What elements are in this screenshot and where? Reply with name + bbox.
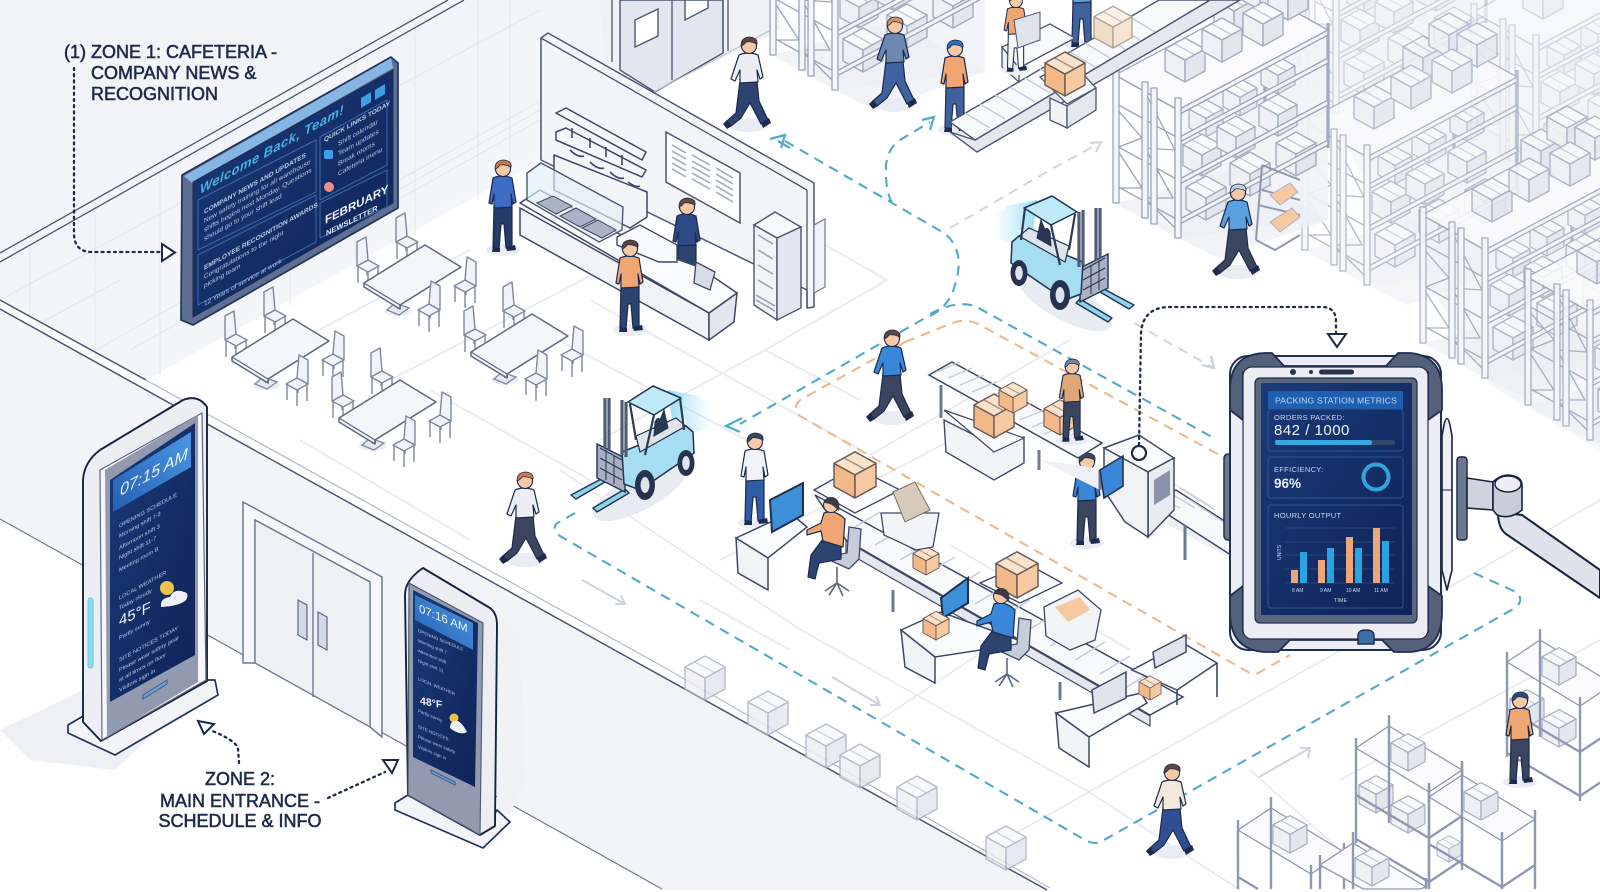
zone 1: dotted arrow to wall display — [74, 68, 175, 261]
zone 2: large kiosk: Visitors sign in — [119, 668, 155, 694]
forklift near racks — [993, 196, 1134, 342]
zone 3: ruggedized tablet: 10 AM — [1346, 588, 1360, 594]
zone 2: small kiosk: Partly sunny — [418, 708, 443, 723]
packing desks with conveyor — [736, 452, 1217, 767]
zone 3: ruggedized tablet: 96% — [1274, 476, 1301, 491]
zone 3: ruggedized tablet: 842 / 1000 — [1274, 422, 1350, 439]
zone 2: large kiosk: at all times on floor — [119, 652, 166, 684]
zone 3: tablet mount arm — [1457, 457, 1600, 598]
zone 1: wall display: FEBRUARY — [325, 182, 388, 227]
zone 2: large kiosk: Please wear safety gear — [119, 635, 179, 674]
zone 1: wall display: picking team — [204, 263, 241, 290]
zone 2: small kiosk: Morning shift 7 — [418, 638, 447, 655]
zone 2: large kiosk: LOCAL WEATHER — [119, 570, 167, 602]
cafeteria tables and chairs — [225, 213, 583, 467]
zone 2: callout label: MAIN ENTRANCE - — [160, 791, 320, 811]
zone 2: callout label: ZONE 2: — [205, 769, 275, 789]
zone 1: wall display: Break rooms — [338, 140, 375, 168]
zone 2: large kiosk — [0, 398, 218, 770]
zone 2: small kiosk: Night shift 11 — [418, 658, 444, 674]
zone 2: callout label: SCHEDULE & INFO — [158, 811, 322, 831]
picking cart — [1256, 165, 1300, 250]
zone 3: dotted callout to tablet — [1132, 307, 1346, 460]
zone 1: wall display: Cafeteria menu — [338, 146, 383, 178]
zone 1: wall display — [181, 57, 398, 325]
zone 2: large kiosk: Night shift 11-7 — [119, 535, 157, 562]
zone 1: wall display: shifts begins next Monday. Questions — [204, 167, 312, 234]
zone 2: small kiosk — [395, 568, 525, 848]
zone 2: main entrance double doors — [243, 502, 382, 737]
zone 3: ruggedized tablet: 9 AM — [1320, 588, 1331, 594]
dashed floor routes — [555, 117, 1520, 843]
cafeteria server behind counter — [670, 198, 704, 294]
zone 3: ruggedized tablet: 11 AM — [1374, 588, 1388, 594]
front wall face — [0, 300, 1050, 890]
drinks fridge — [754, 212, 801, 320]
serving shelves and cabinet — [554, 108, 647, 228]
zone 1: callout label: RECOGNITION — [91, 84, 218, 104]
zone 3: ruggedized tablet: TIME — [1334, 598, 1347, 604]
zone 3: ruggedized tablet: PACKING STATION METRICS — [1275, 396, 1397, 406]
zone 2: large kiosk: Partly sunny — [119, 619, 150, 642]
zone 1: wall display: 12 Years of service at work — [204, 258, 282, 308]
zone 2: large kiosk: 45°F — [119, 599, 151, 630]
zone 2: small kiosk: SITE NOTICES — [418, 724, 448, 742]
zone 1: wall display: NEWSLETTER — [326, 203, 378, 238]
floor grid lines — [300, 245, 1600, 890]
faded boxes along the front wall — [685, 656, 1026, 870]
cafeteria customers — [486, 160, 647, 336]
zone 1: wall display: New safety training for all warehouse — [204, 159, 311, 225]
serving counter with glass case — [520, 163, 737, 340]
central conveyor line and scanner — [929, 359, 1234, 560]
zone 3: ruggedized tablet: 8 AM — [1292, 588, 1303, 594]
zone 2: small kiosk: 07:16 AM — [419, 601, 468, 635]
zone 2: small kiosk: LOCAL WEATHER — [418, 676, 456, 697]
top service doors — [600, 0, 780, 92]
zone 3: ruggedized tablet: UNITS — [1277, 544, 1283, 560]
zone 2: large kiosk: 07:15 AM — [120, 443, 189, 500]
zone 2: large kiosk: Meeting room B — [119, 547, 158, 574]
zone 3: ruggedized tablet — [1224, 353, 1442, 652]
zone 1: wall display: Welcome Back, Team! — [200, 101, 344, 197]
far racking haze — [1330, 0, 1600, 450]
zone 2: small kiosk: Please wear safety — [418, 734, 456, 755]
zone 3: ruggedized tablet: EFFICIENCY: — [1274, 465, 1324, 474]
zone 2: dotted arrows to kiosks — [198, 721, 398, 798]
top conveyor and packing desk — [950, 0, 1240, 152]
zone 1: wall display: Team updates — [338, 128, 379, 158]
zone 1: wall display: EMPLOYEE RECOGNITION AWARDS — [204, 201, 318, 272]
zone 1: callout label: COMPANY NEWS & — [91, 63, 256, 83]
zone 1: wall display: QUICK LINKS TODAY — [324, 100, 390, 144]
forklift near cafeteria — [571, 386, 712, 532]
back wall with tile grid — [0, 0, 640, 380]
warehouse racks: far rows — [770, 0, 1600, 460]
zone 2: large kiosk: OPENING SCHEDULE — [119, 492, 177, 530]
walking staff — [499, 0, 1260, 859]
zone 2: large kiosk: Today cloudy — [119, 588, 152, 612]
zone 1: wall display: COMPANY NEWS AND UPDATES — [204, 152, 306, 216]
zone 1: wall display: Congratulations to the night — [204, 230, 283, 281]
zone 2: large kiosk: Afternoon shift 3 — [119, 524, 160, 552]
zone 2: large kiosk: SITE NOTICES TODAY — [119, 626, 178, 664]
zone 2: small kiosk: OPENING SCHEDULE — [418, 628, 463, 652]
zone 2: small kiosk: Visitors sign in — [418, 744, 447, 761]
zone 3: ruggedized tablet: HOURLY OUTPUT — [1274, 511, 1341, 520]
zone 2: large kiosk: Morning shift 7-3 — [119, 511, 161, 540]
zone 2: small kiosk: 48°F — [420, 695, 443, 712]
bottom right shelving units — [1238, 629, 1600, 889]
zone 3: stylus — [1442, 418, 1452, 590]
cafeteria partition wall — [541, 33, 825, 308]
zone 1: callout label: (1) ZONE 1: CAFETERIA - — [64, 42, 277, 62]
zone 1: wall display: Shift calendar — [338, 119, 378, 148]
worker scanning at right shelving — [1503, 692, 1537, 788]
zone 1: wall display: should go to your shift lead — [204, 193, 282, 243]
menu board — [666, 132, 740, 223]
zone 3: ruggedized tablet: ORDERS PACKED: — [1274, 413, 1345, 422]
zone 2: small kiosk: Afternoon shift — [418, 648, 447, 665]
